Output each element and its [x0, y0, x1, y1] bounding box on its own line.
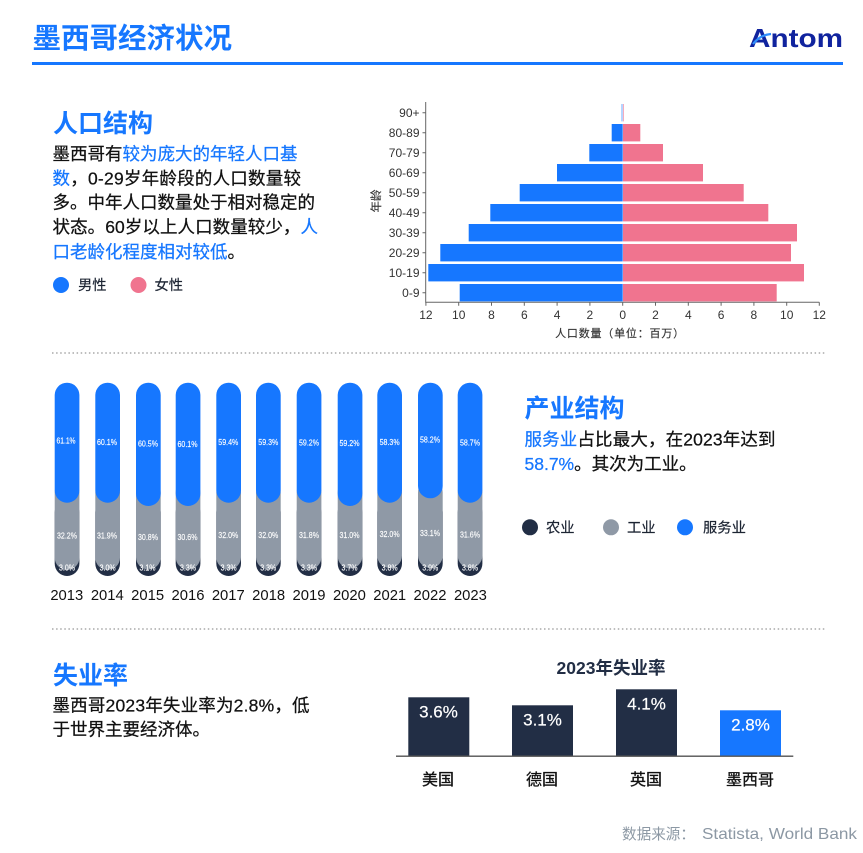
legend: industries: [522, 519, 746, 536]
bar 2018: [256, 383, 281, 576]
bar 2023: 58.7%: [460, 438, 481, 448]
bar 2021: 3.8%: [382, 562, 398, 572]
bar: UK: 英国: [630, 771, 662, 789]
bar 2023: 3.8%: [462, 562, 479, 572]
bar 2022: [418, 383, 443, 576]
population description: 数，0-29岁年龄段的人口数量较: [52, 168, 301, 188]
population description: 多。中年人口数量处于相对稳定的: [52, 192, 315, 212]
bar 2015: [136, 383, 161, 576]
legend: industries: 工业: [627, 520, 656, 536]
bar: Mexico: 墨西哥: [726, 772, 774, 789]
bar 2017: 59.4%: [218, 437, 239, 447]
male bars: [428, 104, 623, 301]
x axis title: 人口数量（单位：百万）: [555, 326, 685, 340]
population description: 墨西哥有较为庞大的年轻人口基: [52, 144, 298, 164]
bar 2017: [216, 383, 241, 576]
legend: gender: 女性: [154, 276, 183, 294]
year labels: 2020: [333, 588, 366, 604]
bar 2023: 31.6%: [460, 530, 481, 540]
bar: UK: [616, 689, 677, 789]
bar 2023: [458, 383, 482, 576]
population tick labels: 2: [652, 308, 659, 322]
population description: 口老龄化程度相对较低。: [52, 242, 245, 262]
bar 2017: 32.0%: [218, 530, 239, 540]
bar 2020: 3.7%: [342, 562, 358, 572]
year labels: 2014: [91, 588, 124, 604]
bar 2021: 58.3%: [380, 437, 400, 447]
age labels: [389, 106, 420, 300]
panel: population structure text: [52, 110, 318, 294]
bar 2014: 60.1%: [97, 437, 118, 447]
bar 2015: 60.5%: [138, 438, 159, 448]
bar 2016: 60.1%: [178, 439, 198, 449]
population description: [52, 144, 318, 262]
bar 2013: [55, 383, 79, 576]
bar 2019: [297, 383, 321, 576]
source note: 数据来源：: [622, 826, 695, 843]
year labels: 2018: [252, 588, 285, 604]
unemployment description: 于世界主要经济体。: [52, 720, 210, 740]
chart: 2023 unemployment bars: [396, 658, 793, 789]
age labels: 80-89: [389, 126, 420, 140]
bar 2019: 59.2%: [299, 438, 320, 448]
population tick labels: 6: [718, 308, 725, 322]
bar 2015: 3.1%: [140, 562, 156, 572]
bar 2022: 33.1%: [420, 528, 441, 538]
year labels: 2019: [293, 588, 325, 604]
unemployment description: 墨西哥2023年失业率为2.8%，低: [52, 696, 310, 716]
logo: Antom: Antom: [749, 23, 843, 53]
bar: Mexico: [720, 710, 781, 789]
age labels: 70-79: [389, 146, 420, 160]
source note: [622, 826, 858, 843]
bar 2015: 30.8%: [138, 532, 159, 542]
population tick labels: 0: [619, 308, 626, 322]
industry description: 58.7%。其次为工业。: [524, 454, 697, 474]
female bars: [623, 104, 804, 301]
year labels: 2015: [131, 588, 164, 604]
bar 2019: 31.8%: [299, 530, 320, 540]
source note: Statista, World Bank: [702, 826, 858, 843]
age labels: 50-59: [389, 186, 420, 200]
panel: unemployment text: [52, 662, 310, 740]
bar: UK: 4.1%: [627, 694, 666, 713]
bar: USA: [408, 697, 469, 789]
chart: population pyramid: [369, 102, 826, 340]
chart: industry structure stacked bars: [50, 383, 487, 604]
bar 2018: 59.3%: [258, 437, 279, 447]
age labels: 10-19: [389, 266, 420, 280]
age labels: 0-9: [402, 286, 420, 300]
age labels: 40-49: [389, 206, 420, 220]
year labels: 2021: [373, 588, 406, 604]
year labels: 2022: [414, 588, 446, 604]
legend: gender: 男性: [78, 277, 107, 294]
bar: USA: 3.6%: [419, 703, 458, 722]
bar 2014: 3.0%: [100, 562, 116, 572]
population tick labels: 4: [685, 308, 692, 322]
bar: Mexico: 2.8%: [731, 716, 770, 735]
bar 2014: 31.9%: [97, 530, 118, 540]
bar 2021: 32.0%: [380, 529, 400, 539]
bar 2020: 31.0%: [340, 530, 360, 540]
heading: unemployment: 失业率: [53, 662, 128, 690]
legend: industries: 农业: [546, 520, 575, 536]
unemployment description: [52, 696, 310, 740]
bar 2020: [338, 383, 362, 576]
bar 2019: 3.3%: [301, 562, 318, 572]
population tick labels: 12: [813, 308, 826, 322]
population tick labels: 8: [488, 308, 495, 322]
year labels: 2017: [212, 588, 245, 604]
bar: USA: 美国: [422, 771, 454, 789]
bar 2018: 3.3%: [260, 562, 277, 572]
bar 2016: 3.3%: [180, 562, 197, 572]
population tick labels: 10: [780, 308, 794, 322]
age labels: 60-69: [389, 166, 420, 180]
bar 2022: 3.9%: [422, 562, 439, 572]
bar 2020: 59.2%: [340, 438, 360, 448]
baseline: [396, 756, 793, 757]
age labels: 90+: [399, 106, 420, 120]
heading: population structure: 人口结构: [53, 110, 153, 138]
population tick labels: 8: [751, 308, 758, 322]
header: [32, 23, 843, 65]
year labels: 2023: [454, 588, 487, 604]
legend: industries: 服务业: [703, 520, 746, 536]
industry description: 服务业占比最大，在2023年达到: [524, 430, 776, 450]
bar 2016: [176, 383, 200, 576]
bar 2013: 61.1%: [56, 436, 76, 446]
y axis title: 年龄: [369, 189, 383, 212]
year labels: 2016: [172, 588, 204, 604]
year labels: 2013: [50, 588, 83, 604]
age labels: 30-39: [389, 226, 420, 240]
axes: [422, 102, 819, 306]
population description: 状态。60岁以上人口数量较少，人: [52, 217, 318, 237]
bar 2022: 58.2%: [420, 434, 441, 444]
header rule: [32, 62, 843, 65]
population tick labels: 2: [587, 308, 594, 322]
legend: gender: [53, 276, 183, 294]
title: 墨西哥经济状况: [32, 23, 232, 55]
population tick labels: 10: [452, 308, 466, 322]
population tick labels: 12: [419, 308, 433, 322]
bar: Germany: 德国: [526, 771, 558, 789]
industry description: [524, 430, 776, 474]
year labels: [50, 588, 487, 604]
bar: Germany: 3.1%: [523, 711, 562, 730]
bar 2014: [95, 383, 120, 576]
bar: Germany: [512, 705, 573, 789]
heading: industry structure: 产业结构: [524, 395, 625, 423]
bar 2013: 3.0%: [59, 562, 76, 572]
age labels: 20-29: [389, 246, 420, 260]
panel: industry structure text: [522, 395, 776, 536]
bar 2018: 32.0%: [258, 530, 279, 540]
population tick labels: [419, 308, 826, 322]
bar 2013: 32.2%: [57, 530, 78, 540]
population tick labels: 4: [554, 308, 561, 322]
chart title: 2023年失业率: [557, 658, 665, 678]
bar 2021: [377, 383, 402, 576]
population tick labels: 6: [521, 308, 528, 322]
bar 2017: 3.3%: [221, 562, 237, 572]
bar 2016: 30.6%: [178, 532, 198, 542]
